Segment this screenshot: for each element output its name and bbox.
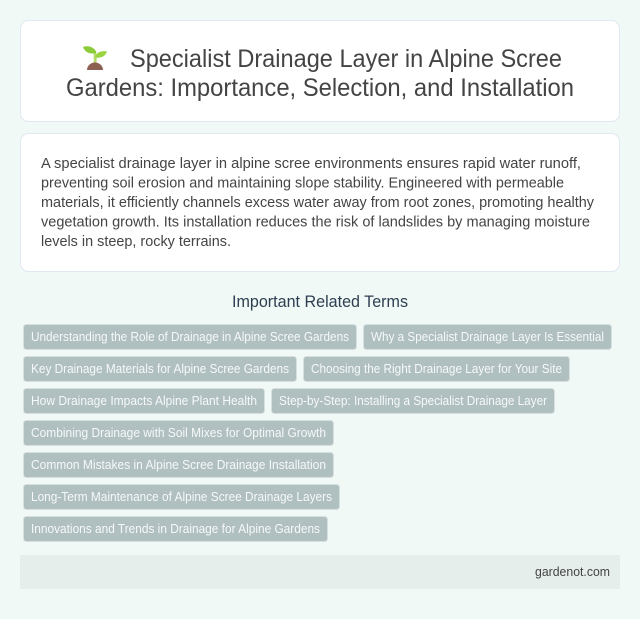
tag 1 <box>24 324 356 350</box>
panel: description: materials, it efficiently channels excess water away from root zones, promoting healthy <box>41 194 594 211</box>
panel: title card <box>20 20 620 122</box>
icon: seedling <box>83 46 107 70</box>
tag 3: Key Drainage Materials for Alpine Scree Gardens <box>31 361 289 376</box>
footer: gardenot.com <box>535 565 610 579</box>
panel: description: levels in steep, rocky terrains. <box>41 233 231 250</box>
tag 1: Understanding the Role of Drainage in Alpine Scree Gardens <box>31 329 349 344</box>
tag 4: Choosing the Right Drainage Layer for Your Site <box>311 361 562 376</box>
footer <box>20 555 620 589</box>
panel: description <box>20 134 620 272</box>
panel: description: A specialist drainage layer in alpine scree environments ensures rapid water runoff, <box>41 155 581 172</box>
title line 2: Gardens: Importance, Selection, and Installation <box>66 74 574 102</box>
tag 7: Combining Drainage with Soil Mixes for Optimal Growth <box>31 425 326 440</box>
tag list <box>24 324 612 542</box>
tag 5: How Drainage Impacts Alpine Plant Health <box>31 393 257 408</box>
tag 9: Long-Term Maintenance of Alpine Scree Drainage Layers <box>31 489 332 504</box>
tag 6 <box>272 388 554 414</box>
tag 10: Innovations and Trends in Drainage for Alpine Gardens <box>31 521 320 536</box>
tag 8 <box>24 452 334 478</box>
tag 2: Why a Specialist Drainage Layer Is Essential <box>371 329 604 344</box>
tag 10 <box>24 516 328 542</box>
tag 4 <box>304 356 570 382</box>
tag 5 <box>24 388 264 414</box>
tag 7 <box>24 420 334 446</box>
tag 9 <box>24 484 340 510</box>
panel: description: preventing soil erosion and maintaining slope stability. Engineered with permeable <box>41 174 564 192</box>
tag 6: Step-by-Step: Installing a Specialist Drainage Layer <box>279 393 548 408</box>
panel: description: vegetation growth. Its installation reduces the risk of landslides by managing moisture <box>41 214 590 230</box>
heading: important related terms: Important Related Terms <box>232 293 408 311</box>
tag 3 <box>24 356 296 382</box>
tag 2 <box>364 324 612 350</box>
title line 1: Specialist Drainage Layer in Alpine Scree <box>130 45 562 73</box>
tag 8: Common Mistakes in Alpine Scree Drainage Installation <box>31 457 326 472</box>
